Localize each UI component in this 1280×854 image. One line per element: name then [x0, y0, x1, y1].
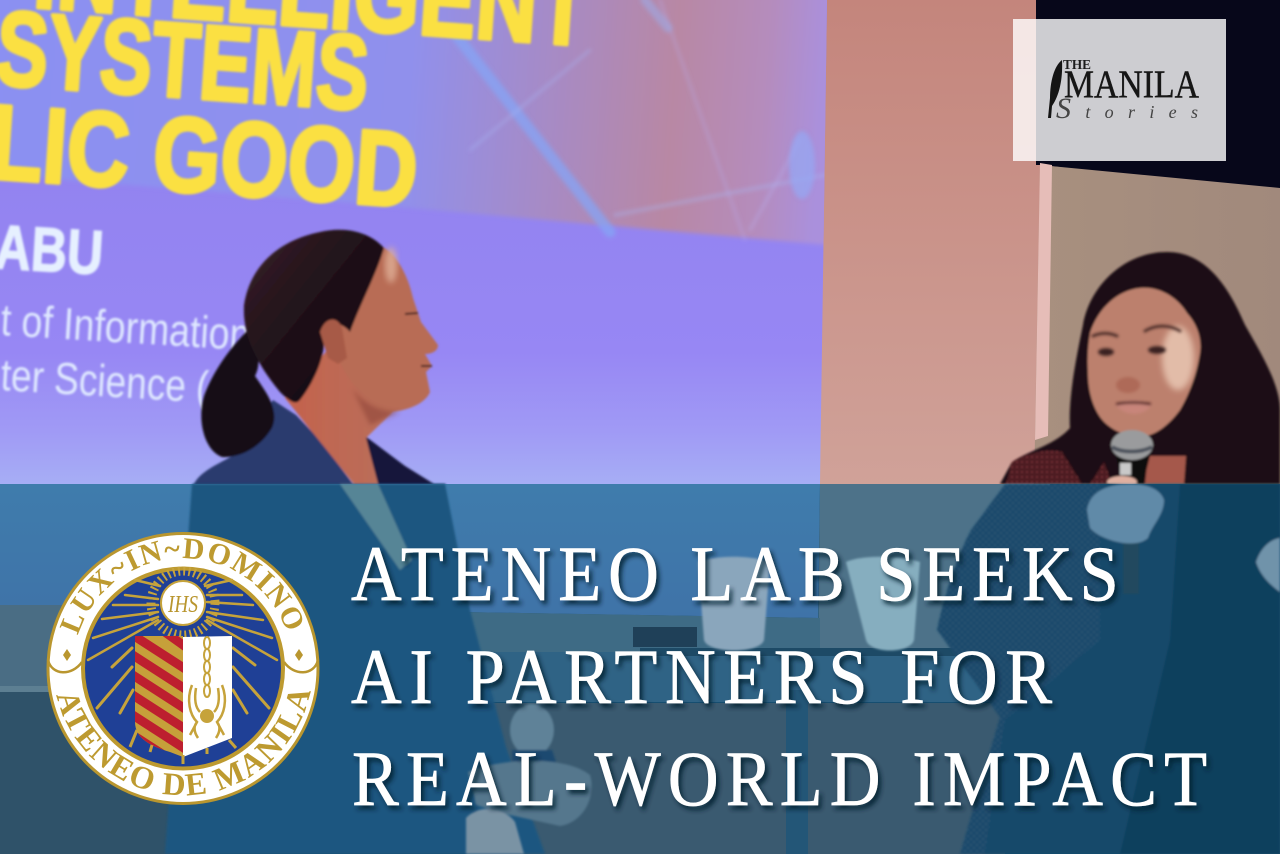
neck	[285, 330, 400, 484]
left woman's hands and microphone	[466, 704, 592, 854]
background: pink stage wall	[800, 0, 1060, 490]
table leg	[786, 690, 808, 854]
eye and lips	[405, 313, 432, 366]
headline line 3: REAL-WORLD IMPACT	[352, 737, 1207, 823]
forehead highlight	[385, 247, 397, 283]
headline: Ateneo Lab Seeks AI Partners for Real-World Impact	[351, 532, 1207, 823]
translucent blue banner with photo continuing beneath	[0, 484, 1280, 854]
icon: quill feather	[1048, 60, 1062, 118]
face	[335, 245, 438, 412]
other hand at the edge	[1256, 538, 1280, 592]
hair	[244, 230, 384, 402]
right wall seen through banner	[818, 484, 1050, 660]
table edge	[640, 648, 990, 656]
logo word MANILA: MANILA	[1064, 63, 1199, 106]
raised hand	[1087, 484, 1164, 543]
background: dark upper right corner	[1036, 0, 1280, 190]
shield feet	[130, 730, 236, 764]
slide headline text	[0, 0, 574, 209]
heraldic chain	[204, 637, 210, 697]
cup one	[698, 557, 770, 650]
lower wall seen through banner	[0, 692, 180, 854]
seal: Ateneo de Manila	[46, 532, 320, 805]
screen seen through banner	[0, 484, 820, 618]
sunburst rays	[88, 571, 277, 713]
ear	[320, 319, 347, 364]
photo: right woman speaking	[1000, 252, 1280, 488]
ponytail	[201, 331, 274, 457]
red blouse	[1006, 450, 1112, 484]
headline line 2: AI PARTNERS FOR	[351, 635, 1053, 721]
left woman's blazer through banner	[165, 484, 545, 854]
IHS monogram: IHS	[167, 592, 198, 618]
projection screen with slide	[0, 0, 850, 490]
long hair	[1000, 252, 1280, 484]
microphone handle	[1123, 540, 1139, 594]
photo: left woman in profile	[185, 230, 458, 500]
cheek highlight	[1162, 326, 1194, 390]
table lower cabinet	[480, 703, 1005, 854]
motto: Lux in Domino: LUX~IN~DOMINO	[60, 538, 302, 635]
slide presenter affiliation: t of Information	[0, 294, 252, 360]
ring dividers with diamonds	[48, 649, 318, 672]
slide headline text: LIC GOOD	[0, 83, 421, 230]
right woman's body through banner	[937, 484, 1280, 854]
slide header band	[0, 0, 850, 247]
slide network lines	[452, 0, 825, 240]
wall behind the table	[460, 612, 820, 660]
logo word THE: THE	[1063, 58, 1091, 73]
shield left half: red and gold stripes	[135, 636, 183, 756]
seal outer ring	[48, 534, 318, 804]
blazer	[185, 400, 458, 500]
slide presenter affiliation: ter Science (	[0, 349, 210, 413]
face shadow under the jaw	[352, 388, 400, 425]
background: partition panel	[1034, 163, 1280, 490]
table top	[470, 652, 1005, 702]
black box on table	[633, 627, 697, 647]
microphone	[1107, 430, 1153, 488]
blue inner field	[83, 568, 283, 768]
dark inner lapel	[365, 436, 434, 484]
name: Ateneo de Manila: ATENEO DE MANILA	[56, 691, 311, 796]
shield right half: white with chain and wolves	[183, 636, 232, 757]
IHS medallion	[161, 581, 205, 625]
face	[1088, 288, 1200, 437]
wall seen through banner	[0, 605, 180, 690]
headline line 1: ATENEO LAB SEEKS	[351, 532, 1119, 618]
neck	[1145, 456, 1186, 484]
logo panel: The Manila Stories	[1013, 19, 1226, 161]
cup two	[846, 557, 920, 650]
eyes, brows, mouth	[1093, 326, 1180, 414]
heraldic wolves and pot	[189, 685, 225, 738]
logo word Stories: S tories	[1056, 92, 1198, 125]
slide node glow	[789, 131, 815, 199]
slide presenter affiliation	[0, 304, 248, 410]
